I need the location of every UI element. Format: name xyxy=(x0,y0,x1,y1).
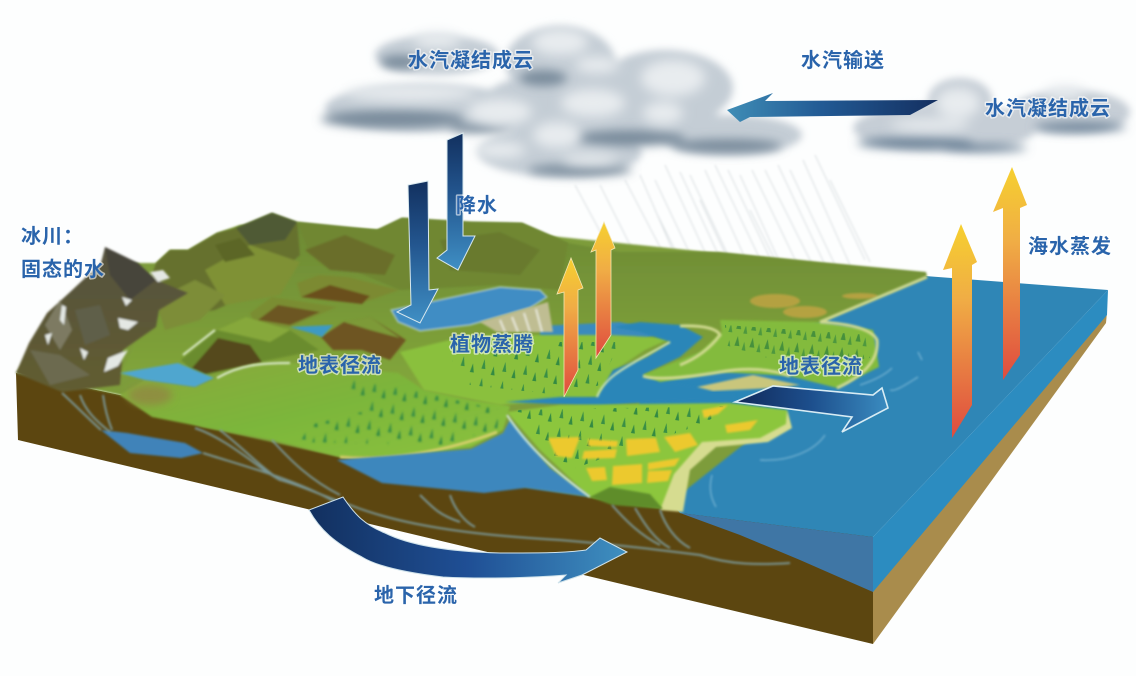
label: surface runoff right: 地表径流 xyxy=(779,355,863,378)
hill: brown hill by small lake xyxy=(321,317,406,360)
sea right blue face xyxy=(873,290,1108,592)
plain trees xyxy=(300,378,500,445)
label: glacier line 2: 固态的水 xyxy=(21,257,105,281)
label: glacier line 1: 冰川： xyxy=(21,225,84,248)
right coast sand line xyxy=(643,277,927,388)
label: plant transpiration: 植物蒸腾 xyxy=(450,332,534,356)
sea surface xyxy=(600,276,1108,537)
sea wave lines xyxy=(710,352,922,507)
winding river xyxy=(505,322,737,406)
base land xyxy=(16,225,926,508)
underground water body xyxy=(101,430,203,458)
sea front dark face xyxy=(680,513,873,592)
delta trees xyxy=(515,406,735,470)
arrow: surface runoff xyxy=(735,386,888,432)
arrow: sea evaporation left xyxy=(943,224,977,438)
lower farmland delta xyxy=(507,403,790,508)
reservoir xyxy=(391,287,547,331)
front lake xyxy=(337,420,590,497)
arrow: underground runoff xyxy=(309,497,627,583)
3D block: terrain and sea xyxy=(16,213,1108,644)
cloud silhouette xyxy=(325,26,802,177)
arrow: precipitation short xyxy=(437,133,475,270)
delta sand shore xyxy=(660,410,792,512)
channel to sea xyxy=(640,378,830,412)
brownish plain patch xyxy=(128,385,172,405)
middle forest land xyxy=(400,335,672,405)
clouds: right cloud xyxy=(853,78,1130,152)
block: right tan face xyxy=(873,312,1107,644)
underground streams xyxy=(62,393,790,564)
label: precipitation: 降水 xyxy=(456,194,498,217)
arrow: precipitation long xyxy=(397,181,438,323)
hill: green top ridge xyxy=(297,275,399,303)
main left plain xyxy=(120,363,510,457)
small lake behind hill xyxy=(290,325,333,337)
cloud light puffs xyxy=(345,29,705,166)
middle forest trees xyxy=(450,342,620,395)
river shore lines xyxy=(183,330,670,458)
mountain range xyxy=(145,213,568,377)
lake at foot of mountains xyxy=(120,363,214,387)
rain streaks xyxy=(575,155,870,290)
label: surface runoff left: 地表径流 xyxy=(298,354,382,377)
clouds: main cloud group xyxy=(321,26,802,177)
sandbar xyxy=(697,375,800,391)
label: sea evaporation: 海水蒸发 xyxy=(1028,235,1112,258)
green fringe lower delta edge xyxy=(590,487,663,509)
back farmland patches xyxy=(750,293,878,318)
label: underground runoff: 地下径流 xyxy=(374,584,458,607)
yellow fields xyxy=(548,405,758,485)
label: vapour transport: 水汽输送 xyxy=(801,49,885,72)
hill: front green hill xyxy=(181,317,319,377)
block: front soil face xyxy=(16,373,873,644)
cloud shadows xyxy=(321,55,782,176)
snow patches xyxy=(45,270,170,372)
right peninsula and forest xyxy=(643,320,879,388)
label: condensation left: 水汽凝结成云 xyxy=(408,48,534,72)
arrow: transpiration left xyxy=(557,258,583,397)
arrow: sea evaporation right xyxy=(993,167,1027,380)
arrow: transpiration right xyxy=(591,222,615,358)
river strip below dam xyxy=(540,322,660,342)
right forest trees xyxy=(725,325,870,368)
dam xyxy=(480,302,553,332)
label: condensation right: 水汽凝结成云 xyxy=(985,96,1111,120)
delta west shoreline xyxy=(507,415,590,497)
rocky glacier mountains xyxy=(16,247,188,392)
back land xyxy=(120,213,927,400)
arrow: water vapour transport xyxy=(727,93,938,122)
hill: mid brown ridge xyxy=(250,297,337,327)
